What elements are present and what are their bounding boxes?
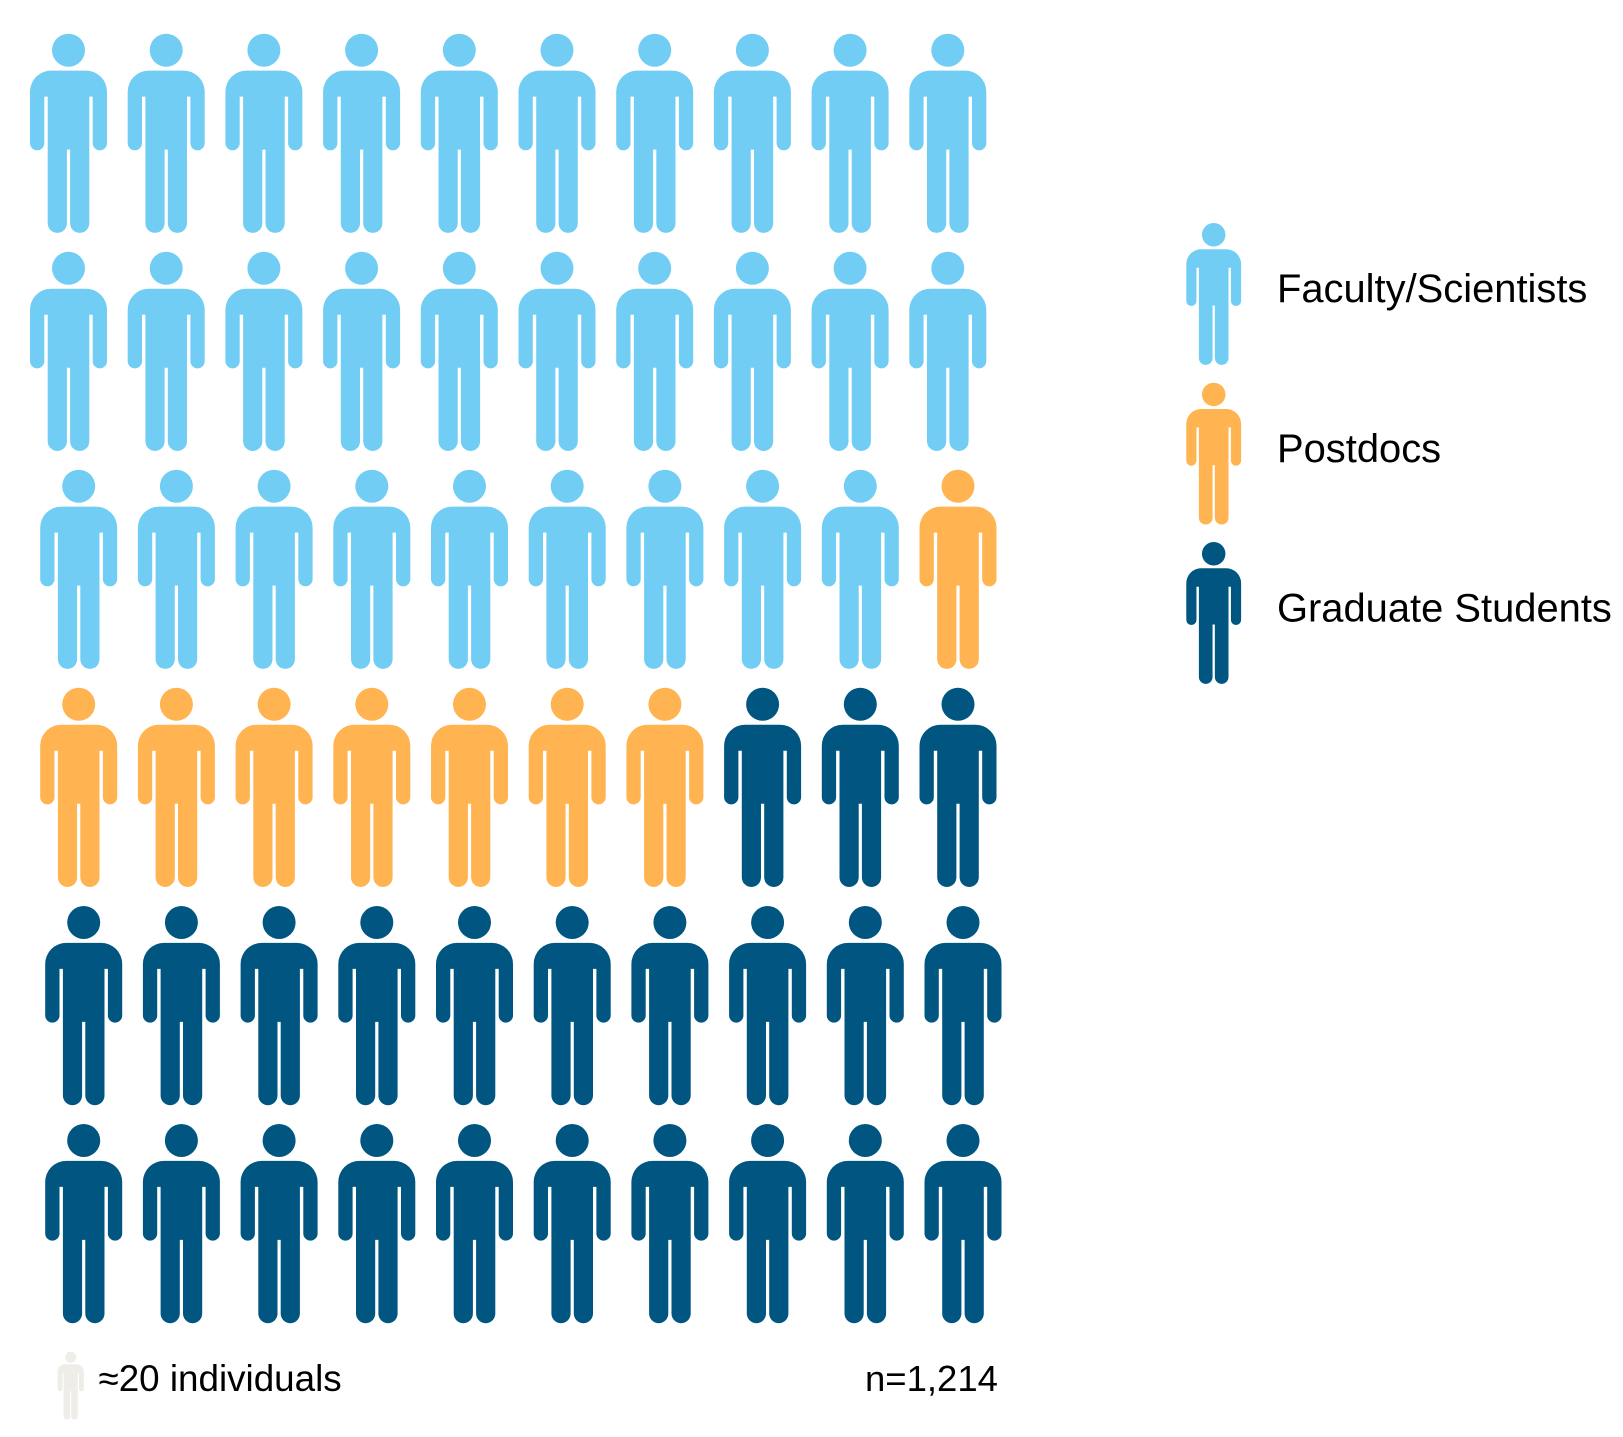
row 5: graduate students xyxy=(45,906,1001,1105)
icon: person, postdoc xyxy=(920,470,996,669)
icon: person, graduate student xyxy=(827,1124,904,1323)
icon: person, faculty xyxy=(30,34,107,233)
icon: person, faculty xyxy=(225,34,302,233)
legend label: faculty/scientists: Faculty/Scientists xyxy=(1277,267,1587,311)
icon: person, graduate student xyxy=(241,906,318,1105)
icon: person, postdoc xyxy=(138,688,215,887)
icon: person, faculty xyxy=(616,252,693,451)
icon: person, faculty xyxy=(30,252,107,451)
icon: person, graduate student xyxy=(45,1124,122,1323)
icon: person, faculty xyxy=(724,470,801,669)
icon: person, graduate student xyxy=(729,906,806,1105)
row 2: faculty/scientists xyxy=(30,252,986,451)
icon: person, faculty xyxy=(323,34,400,233)
legend item: postdocs xyxy=(1186,383,1441,525)
icon: person, faculty xyxy=(822,470,899,669)
icon: person, graduate student xyxy=(924,1124,1002,1323)
icon: person, faculty xyxy=(323,252,400,451)
icon: person, faculty xyxy=(236,470,313,669)
icon: person, faculty xyxy=(128,34,205,233)
row 6: graduate students xyxy=(45,1124,1001,1323)
icon: person, faculty xyxy=(909,252,986,451)
icon: person, faculty xyxy=(714,252,791,451)
row 4: seven postdocs, three graduate students xyxy=(40,688,996,887)
icon: person, graduate student xyxy=(631,906,708,1105)
icon: person, faculty xyxy=(616,34,693,233)
icon: person, graduate student xyxy=(534,1124,611,1323)
icon: person, faculty xyxy=(812,252,889,451)
icon: person, graduate student xyxy=(920,688,996,887)
icon: person, graduate student xyxy=(241,1124,318,1323)
pictogram chart: 60 person icons xyxy=(30,34,1002,1323)
icon: person, graduate student xyxy=(924,906,1002,1105)
icon: person, faculty xyxy=(421,252,498,451)
legend item: graduate students xyxy=(1186,542,1612,684)
icon: person, faculty xyxy=(431,470,508,669)
icon: person, faculty xyxy=(529,470,606,669)
icon: person, graduate student xyxy=(724,688,801,887)
icon: person, graduate student xyxy=(45,906,122,1105)
legend xyxy=(1186,223,1612,684)
icon: person, postdoc xyxy=(431,688,508,887)
icon: person, faculty xyxy=(333,470,410,669)
row 1: faculty/scientists xyxy=(30,34,986,233)
icon: person, graduate student xyxy=(143,1124,220,1323)
icon: legend person, orange xyxy=(1186,383,1241,525)
icon: person, faculty xyxy=(626,470,703,669)
icon: person, postdoc xyxy=(40,688,117,887)
icon: person, faculty xyxy=(518,252,596,451)
icon: person, graduate student xyxy=(338,1124,415,1323)
icon: person, faculty xyxy=(421,34,498,233)
icon: person, graduate student xyxy=(436,1124,513,1323)
icon: small grey person xyxy=(58,1352,84,1419)
icon: person, graduate student xyxy=(631,1124,708,1323)
icon: legend person, navy xyxy=(1186,542,1241,684)
icon: person, graduate student xyxy=(822,688,899,887)
icon: person, postdoc xyxy=(626,688,703,887)
unit key: one icon is about 20 individuals xyxy=(58,1352,342,1419)
icon: person, faculty xyxy=(909,34,986,233)
legend item: faculty/scientists xyxy=(1186,223,1587,365)
icon: person, faculty xyxy=(128,252,205,451)
icon: person, postdoc xyxy=(529,688,606,887)
row 3: nine faculty, one postdoc xyxy=(40,470,996,669)
icon: person, graduate student xyxy=(827,906,904,1105)
icon: person, postdoc xyxy=(236,688,313,887)
sample size label: n=1,214 xyxy=(865,1358,998,1399)
legend label: graduate students: Graduate Students xyxy=(1277,587,1612,631)
icon: person, faculty xyxy=(518,34,596,233)
icon: person, graduate student xyxy=(534,906,611,1105)
legend label: postdocs: Postdocs xyxy=(1277,427,1441,471)
icon: legend person, light blue xyxy=(1186,223,1241,365)
icon: person, faculty xyxy=(225,252,302,451)
icon: person, graduate student xyxy=(143,906,220,1105)
icon: person, faculty xyxy=(812,34,889,233)
icon: person, graduate student xyxy=(436,906,513,1105)
key label: ≈20 individuals xyxy=(98,1358,342,1399)
icon: person, postdoc xyxy=(333,688,410,887)
icon: person, faculty xyxy=(138,470,215,669)
icon: person, faculty xyxy=(40,470,117,669)
icon: person, graduate student xyxy=(729,1124,806,1323)
icon: person, faculty xyxy=(714,34,791,233)
icon: person, graduate student xyxy=(338,906,415,1105)
